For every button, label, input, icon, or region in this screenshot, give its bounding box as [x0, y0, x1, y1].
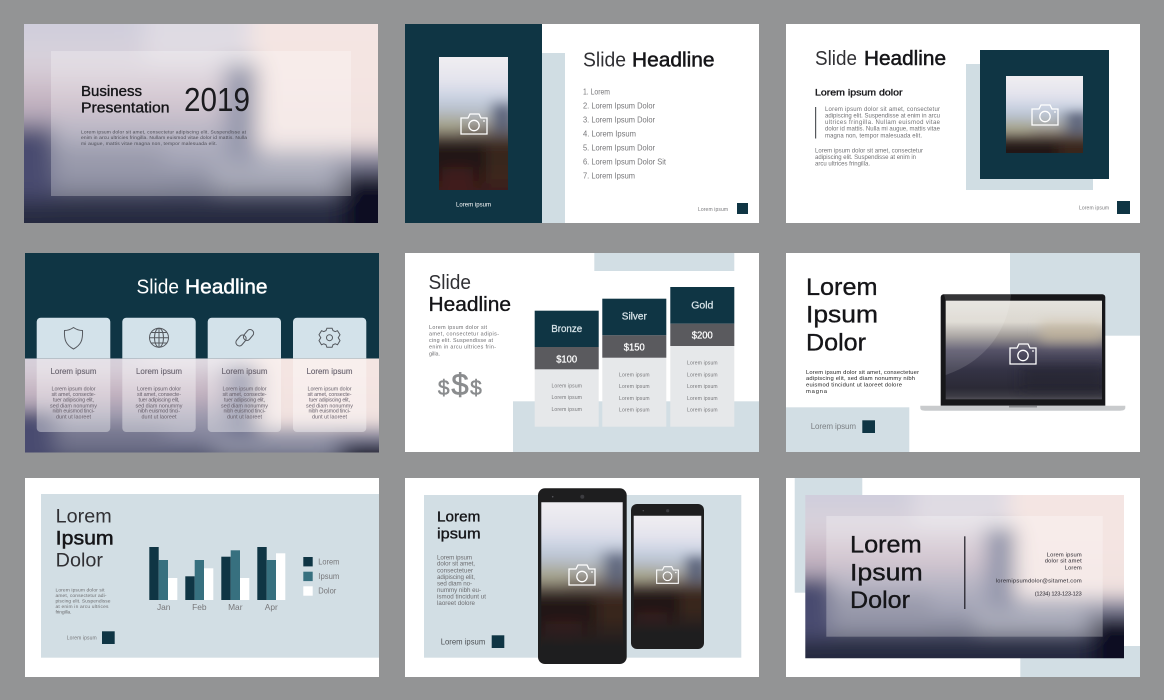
pricing column: silver: Lorem ipsum	[619, 372, 650, 378]
heading: Ipsum	[56, 528, 114, 549]
headline: Headline	[864, 48, 946, 70]
card text: dunt ut laoreet	[142, 414, 177, 420]
body paragraph	[815, 149, 923, 168]
pricing column: gold: Lorem ipsum	[687, 384, 718, 390]
description text: adipiscing elit,	[437, 574, 475, 581]
description text: enim in arcu ultricies fringilla. Nullam euismod vitae dolor id mattis. Nulla	[81, 135, 247, 141]
card text: dunt ut laoreet	[56, 414, 92, 420]
quote paragraph: ultrices fringilla. Nullam euismod vitae	[825, 120, 941, 126]
card text: tuer adipiscing elit,	[53, 398, 94, 404]
numbered list: 4. Lorem Ipsum	[583, 128, 636, 138]
heading: Dolor	[850, 587, 910, 614]
numbered list: 7. Lorem Ipsum	[583, 170, 635, 180]
light panel	[41, 494, 379, 658]
headline	[136, 276, 268, 298]
card text: nibh euismod tinci-	[52, 409, 95, 415]
pricing column: silver: Lorem ipsum	[619, 408, 650, 414]
description text: Lorem ipsum dolor sit	[56, 587, 105, 593]
card text: Lorem ipsum dolor	[222, 386, 267, 392]
pricing column: bronze: Lorem ipsum	[551, 384, 582, 390]
icon: shield	[64, 328, 83, 349]
heading: Lorem	[806, 274, 878, 301]
pricing column: silver: Lorem ipsum	[619, 384, 650, 390]
chart legend	[303, 556, 339, 596]
description text: nummy nibh eu-	[437, 587, 481, 594]
card text: Lorem ipsum dolor	[137, 386, 181, 392]
pricing column: bronze: $100	[556, 354, 578, 366]
title: Presentation	[81, 101, 170, 117]
card text: Lorem ipsum dolor	[52, 386, 96, 392]
headline: Slide	[428, 272, 471, 294]
card 2	[122, 318, 196, 432]
slide background	[786, 478, 1140, 677]
numbered list: 2. Lorem Ipsum Dolor	[583, 100, 655, 110]
headline: Headline	[632, 50, 714, 72]
quote paragraph: Lorem ipsum dolor sit amet, consectetur	[825, 107, 940, 113]
description text: Lorem ipsum dolor sit amet, consectetur adipiscing elit. Suspendisse at	[81, 130, 247, 136]
card text: dunt ut laoreet	[227, 414, 262, 420]
top left accent block	[795, 478, 862, 593]
headline: Slide	[583, 50, 626, 72]
slide 6: laptop mockup	[786, 253, 1140, 452]
small phone	[600, 486, 735, 662]
card title: Lorem ipsum	[222, 367, 268, 376]
contact details: dolor sit amet	[1045, 559, 1082, 565]
footer square	[492, 635, 504, 648]
card text: sed diam nonummy	[136, 403, 183, 409]
slide background	[786, 253, 1140, 452]
headline	[815, 48, 946, 70]
card text: sed diam nonummy	[306, 403, 353, 409]
top accent block	[594, 253, 734, 271]
pricing column: gold: Lorem ipsum	[687, 396, 718, 402]
footer square	[862, 420, 875, 433]
bar chart: Jan	[157, 602, 171, 612]
photo placeholder	[1006, 76, 1083, 153]
photo caption: Lorem ipsum	[456, 202, 491, 208]
description text: piscing elit. Suspendisse	[56, 599, 111, 605]
description text: dolor sit amet,	[437, 561, 475, 568]
description text: adipiscing elit, sed diam nonummy nibh	[806, 376, 915, 382]
contact details: Lorem ipsum	[1047, 552, 1082, 558]
icon: dollar signs: $	[470, 377, 482, 400]
card text: sit amet, consecte-	[52, 392, 96, 398]
teal frame	[980, 50, 1109, 179]
pricing column: gold: $200	[692, 330, 713, 341]
pricing column: silver: Lorem ipsum	[619, 396, 650, 402]
card text: tuer adipiscing elit,	[224, 398, 266, 404]
heading	[437, 510, 481, 542]
icon: dollar signs	[438, 367, 482, 402]
heading: Ipsum	[806, 302, 878, 329]
pricing column: bronze: Lorem ipsum	[551, 395, 582, 401]
footer square	[102, 631, 115, 644]
description text: cing elit. Suspendisse at	[429, 338, 494, 344]
description text: laoreet dolore	[437, 600, 476, 607]
card text: dunt ut laoreet	[312, 414, 348, 420]
card text: sit amet, consecte-	[308, 392, 352, 398]
description text: amet, consectetur adi-	[56, 593, 107, 599]
description text: Lorem ipsum dolor sit	[429, 325, 488, 331]
card text	[306, 386, 353, 420]
footer label: Lorem ipsum	[698, 207, 728, 213]
description text: fringilla.	[56, 610, 72, 616]
headline: Slide	[815, 48, 857, 70]
card text: sed diam nonummy	[221, 403, 268, 409]
description text: amet, consectetur adipis-	[429, 332, 499, 338]
card text: tuer adipiscing elit,	[138, 398, 180, 404]
background photo	[760, 454, 1164, 700]
icon: camera	[569, 565, 595, 585]
description text: euismod tincidunt ut laoreet dolore	[806, 383, 902, 389]
card text: Lorem ipsum dolor	[308, 386, 352, 392]
heading: Ipsum	[850, 559, 923, 586]
slide 1: business presentation cover	[0, 0, 429, 274]
icon: globe	[150, 328, 168, 347]
photo placeholder	[439, 57, 508, 190]
slide background	[25, 478, 379, 677]
vertical divider	[964, 536, 965, 609]
large phone	[501, 466, 663, 683]
heading: Lorem	[56, 506, 112, 527]
pricing column: silver: $150	[624, 342, 645, 353]
pricing column: silver	[602, 299, 666, 427]
footer label: Lorem ipsum	[811, 422, 856, 431]
bar chart: Apr	[265, 602, 278, 612]
card text: nibh euismod tinci-	[224, 409, 266, 415]
quote paragraph	[825, 107, 941, 139]
slide 3: framed photo with text	[786, 24, 1140, 223]
footer label: Lorem ipsum	[67, 636, 97, 642]
bar chart: Feb	[192, 602, 207, 612]
pricing column: gold: Lorem ipsum	[687, 408, 718, 414]
heading: Lorem	[437, 510, 480, 526]
headline: Headline	[185, 276, 268, 298]
numbered list	[583, 86, 667, 180]
pricing column: bronze: Lorem ipsum	[551, 407, 582, 413]
teal side panel	[405, 24, 542, 223]
heading	[56, 506, 114, 572]
slide background	[405, 478, 759, 677]
description text: gilla.	[429, 351, 440, 357]
contact details: (1234) 123-123-123	[1035, 591, 1082, 597]
teal upper band	[25, 253, 379, 358]
card title: Lorem ipsum	[50, 367, 97, 376]
icon: camera	[657, 567, 678, 583]
description text: Lorem ipsum dolor sit amet, consectetuer	[806, 370, 919, 376]
card text: tuer adipiscing elit,	[309, 398, 350, 404]
body paragraph: adipiscing elit. Suspendisse at enim in	[815, 155, 916, 161]
card title: Lorem ipsum	[306, 367, 353, 376]
vertical rule	[815, 107, 816, 138]
description text: consectetuer	[437, 567, 473, 574]
icon: dollar signs: $	[451, 367, 469, 402]
headline: Headline	[428, 294, 511, 316]
description text: ismod tincidunt ut	[437, 594, 486, 601]
light accent block	[542, 53, 565, 223]
slide 2: list with portrait photo	[404, 24, 759, 223]
glass panel	[826, 516, 1103, 637]
numbered list: 1. Lorem	[583, 86, 610, 96]
heading	[850, 531, 923, 614]
light panel	[424, 495, 741, 658]
heading: Lorem	[850, 531, 922, 558]
description text: at enim in arcu ultrices	[56, 604, 109, 610]
card text: sit amet, consecte-	[137, 392, 181, 398]
numbered list: 5. Lorem Ipsum Dolor	[583, 142, 655, 152]
slide 9: contact slide	[760, 454, 1164, 700]
card text	[50, 386, 97, 420]
card 1	[37, 318, 110, 432]
heading	[806, 274, 878, 356]
body paragraph: arcu ultrices fringilla.	[815, 162, 870, 168]
headline	[583, 50, 714, 72]
slide background	[405, 253, 759, 452]
footer square	[737, 203, 748, 214]
title	[81, 84, 170, 117]
description text	[429, 325, 499, 357]
card 4	[293, 318, 366, 432]
icon: camera	[1032, 105, 1058, 125]
description text: sed diam no-	[437, 581, 472, 588]
card text: sit amet, consecte-	[222, 392, 267, 398]
description text	[437, 554, 486, 607]
card title: Lorem ipsum	[136, 367, 182, 376]
heading: ipsum	[437, 526, 481, 542]
slide 7: bar chart	[25, 478, 379, 677]
icon: dollar signs: $	[438, 377, 450, 400]
description text	[81, 130, 247, 147]
quote paragraph: magna non, tempor malesuada elit.	[825, 133, 922, 139]
slide background	[405, 24, 759, 223]
bottom right accent block	[1020, 646, 1140, 677]
description text	[806, 370, 919, 395]
card text	[136, 386, 183, 420]
chart legend: Lorem	[318, 556, 339, 566]
card text: nibh euismod tinci-	[138, 409, 180, 415]
bottom accent block	[513, 401, 759, 452]
quote paragraph: dolor id mattis. Nulla mi augue, mattis vitae	[825, 127, 941, 133]
pricing column: silver: Silver	[622, 312, 647, 323]
heading: Dolor	[56, 551, 104, 572]
description text: enim in arcu ultrices frin-	[429, 345, 496, 351]
heading: Dolor	[806, 329, 866, 356]
pricing column: gold: Lorem ipsum	[687, 372, 718, 378]
numbered list: 3. Lorem Ipsum Dolor	[583, 114, 655, 124]
chart legend: Ipsum	[318, 571, 339, 581]
photo lower band	[25, 358, 379, 452]
description text: Lorem ipsum	[437, 554, 472, 561]
bottom left accent block	[786, 407, 909, 452]
pricing column: gold	[670, 287, 734, 427]
icon: camera	[461, 114, 487, 134]
card text: nibh euismod tinci-	[308, 409, 351, 415]
slide background	[786, 24, 1140, 223]
body paragraph: Lorem ipsum dolor sit amet, consectetur	[815, 149, 923, 155]
bar chart	[149, 547, 285, 612]
quote paragraph: adipiscing elit. Suspendisse at enim in arcu	[825, 114, 940, 120]
glass panel	[51, 51, 351, 196]
contact details: loremipsumdolor@sitamet.com	[996, 578, 1082, 584]
chart legend: Dolor	[318, 586, 336, 596]
slide 8: phone mockups	[405, 466, 759, 683]
footer square	[1117, 201, 1130, 214]
year: 2019	[184, 81, 250, 118]
description text	[56, 587, 111, 616]
laptop mockup	[920, 294, 1125, 411]
subheading: Lorem ipsum dolor	[815, 88, 902, 98]
pricing column: bronze	[535, 311, 599, 427]
headline	[428, 272, 511, 316]
description text: mi augue, mattis vitae magna non, tempor malesuada elit.	[81, 141, 217, 147]
title: Business	[81, 84, 142, 100]
slide 5: pricing table	[405, 253, 759, 452]
bar chart: Mar	[228, 602, 243, 612]
contact details: Lorem	[1065, 565, 1082, 571]
card 3	[208, 318, 281, 432]
footer label: Lorem ipsum	[1079, 205, 1109, 211]
headline: Slide	[136, 276, 179, 298]
top right accent block	[1010, 253, 1140, 336]
card text: sed diam nonummy	[50, 403, 97, 409]
contact details	[996, 552, 1082, 597]
pricing column: gold: Gold	[691, 301, 713, 312]
numbered list: 6. Lorem Ipsum Dolor Sit	[583, 156, 667, 166]
pricing column: gold: Lorem ipsum	[687, 360, 718, 366]
description text: magna	[806, 389, 828, 395]
card text	[221, 386, 268, 420]
icon: camera	[1010, 344, 1036, 364]
icon: link	[234, 328, 255, 347]
slide 4: four feature cards	[0, 253, 430, 519]
footer label: Lorem ipsum	[441, 636, 485, 646]
icon: gear	[319, 328, 340, 347]
background photo	[0, 0, 429, 274]
pricing column: bronze: Bronze	[551, 324, 583, 335]
light accent block	[966, 64, 1093, 190]
